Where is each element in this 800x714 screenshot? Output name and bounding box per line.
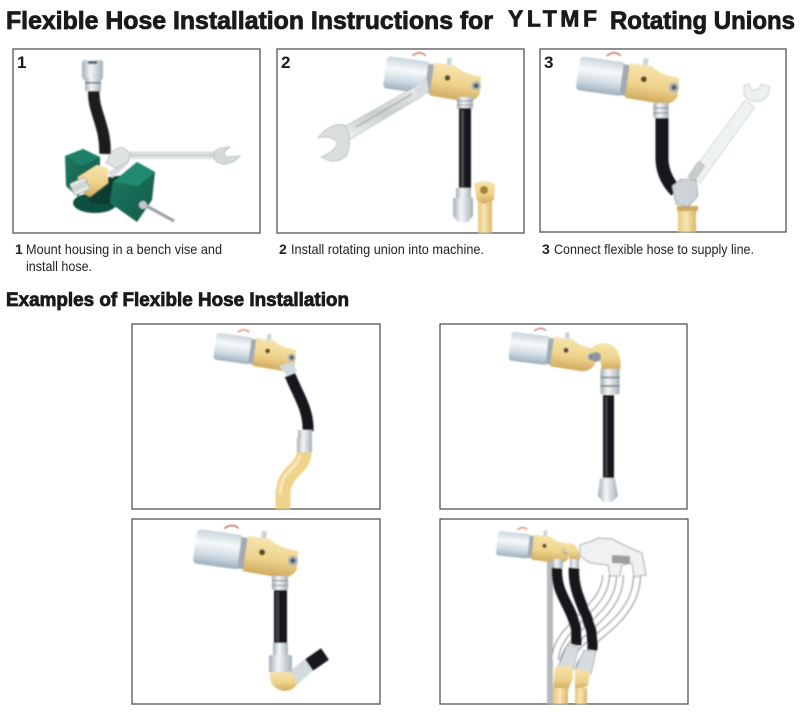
illustration: connecting hose to supply line <box>575 48 769 232</box>
caption: step 3: Connect flexible hose to supply line. <box>554 241 754 257</box>
step number 1: 1 <box>17 53 26 72</box>
illustration: curved hose <box>213 326 312 509</box>
illustration: multiple hose positions with ghost outlines <box>496 525 646 704</box>
caption: step 1 <box>15 241 222 274</box>
caption: step 2: Install rotating union into machine. <box>291 241 484 257</box>
illustration: hose with elbow and side line <box>192 521 325 691</box>
panel: example straight hose with elbow <box>440 324 687 509</box>
panel: step 2 <box>277 48 524 233</box>
title: Rotating Unions <box>610 7 795 35</box>
panel: step 3 <box>540 48 786 232</box>
title: YLTMF <box>508 6 597 32</box>
step number 2: 2 <box>281 53 290 72</box>
panel: example curved hose with brass elbow <box>132 324 380 509</box>
caption: step 1: install hose. <box>26 258 92 274</box>
panel: example hose with bottom elbow <box>132 519 380 704</box>
step number 3: 3 <box>544 53 553 72</box>
caption: step 3: 3 <box>542 241 550 257</box>
title: Flexible Hose Installation Instructions for <box>6 7 493 35</box>
caption: step 1: 1 <box>15 241 23 257</box>
panel: example multiple hose positions <box>440 519 688 704</box>
title <box>6 6 795 35</box>
caption: step 2: 2 <box>279 241 287 257</box>
illustration: installing rotating union with wrench <box>318 48 495 233</box>
panel: step 1 <box>13 49 260 233</box>
illustration: hose mounted in bench vise with wrench <box>65 60 240 222</box>
heading: examples: Examples of Flexible Hose Installation <box>6 289 349 311</box>
caption: step 1: Mount housing in a bench vise and <box>26 241 222 257</box>
illustration: straight hose <box>508 325 621 502</box>
